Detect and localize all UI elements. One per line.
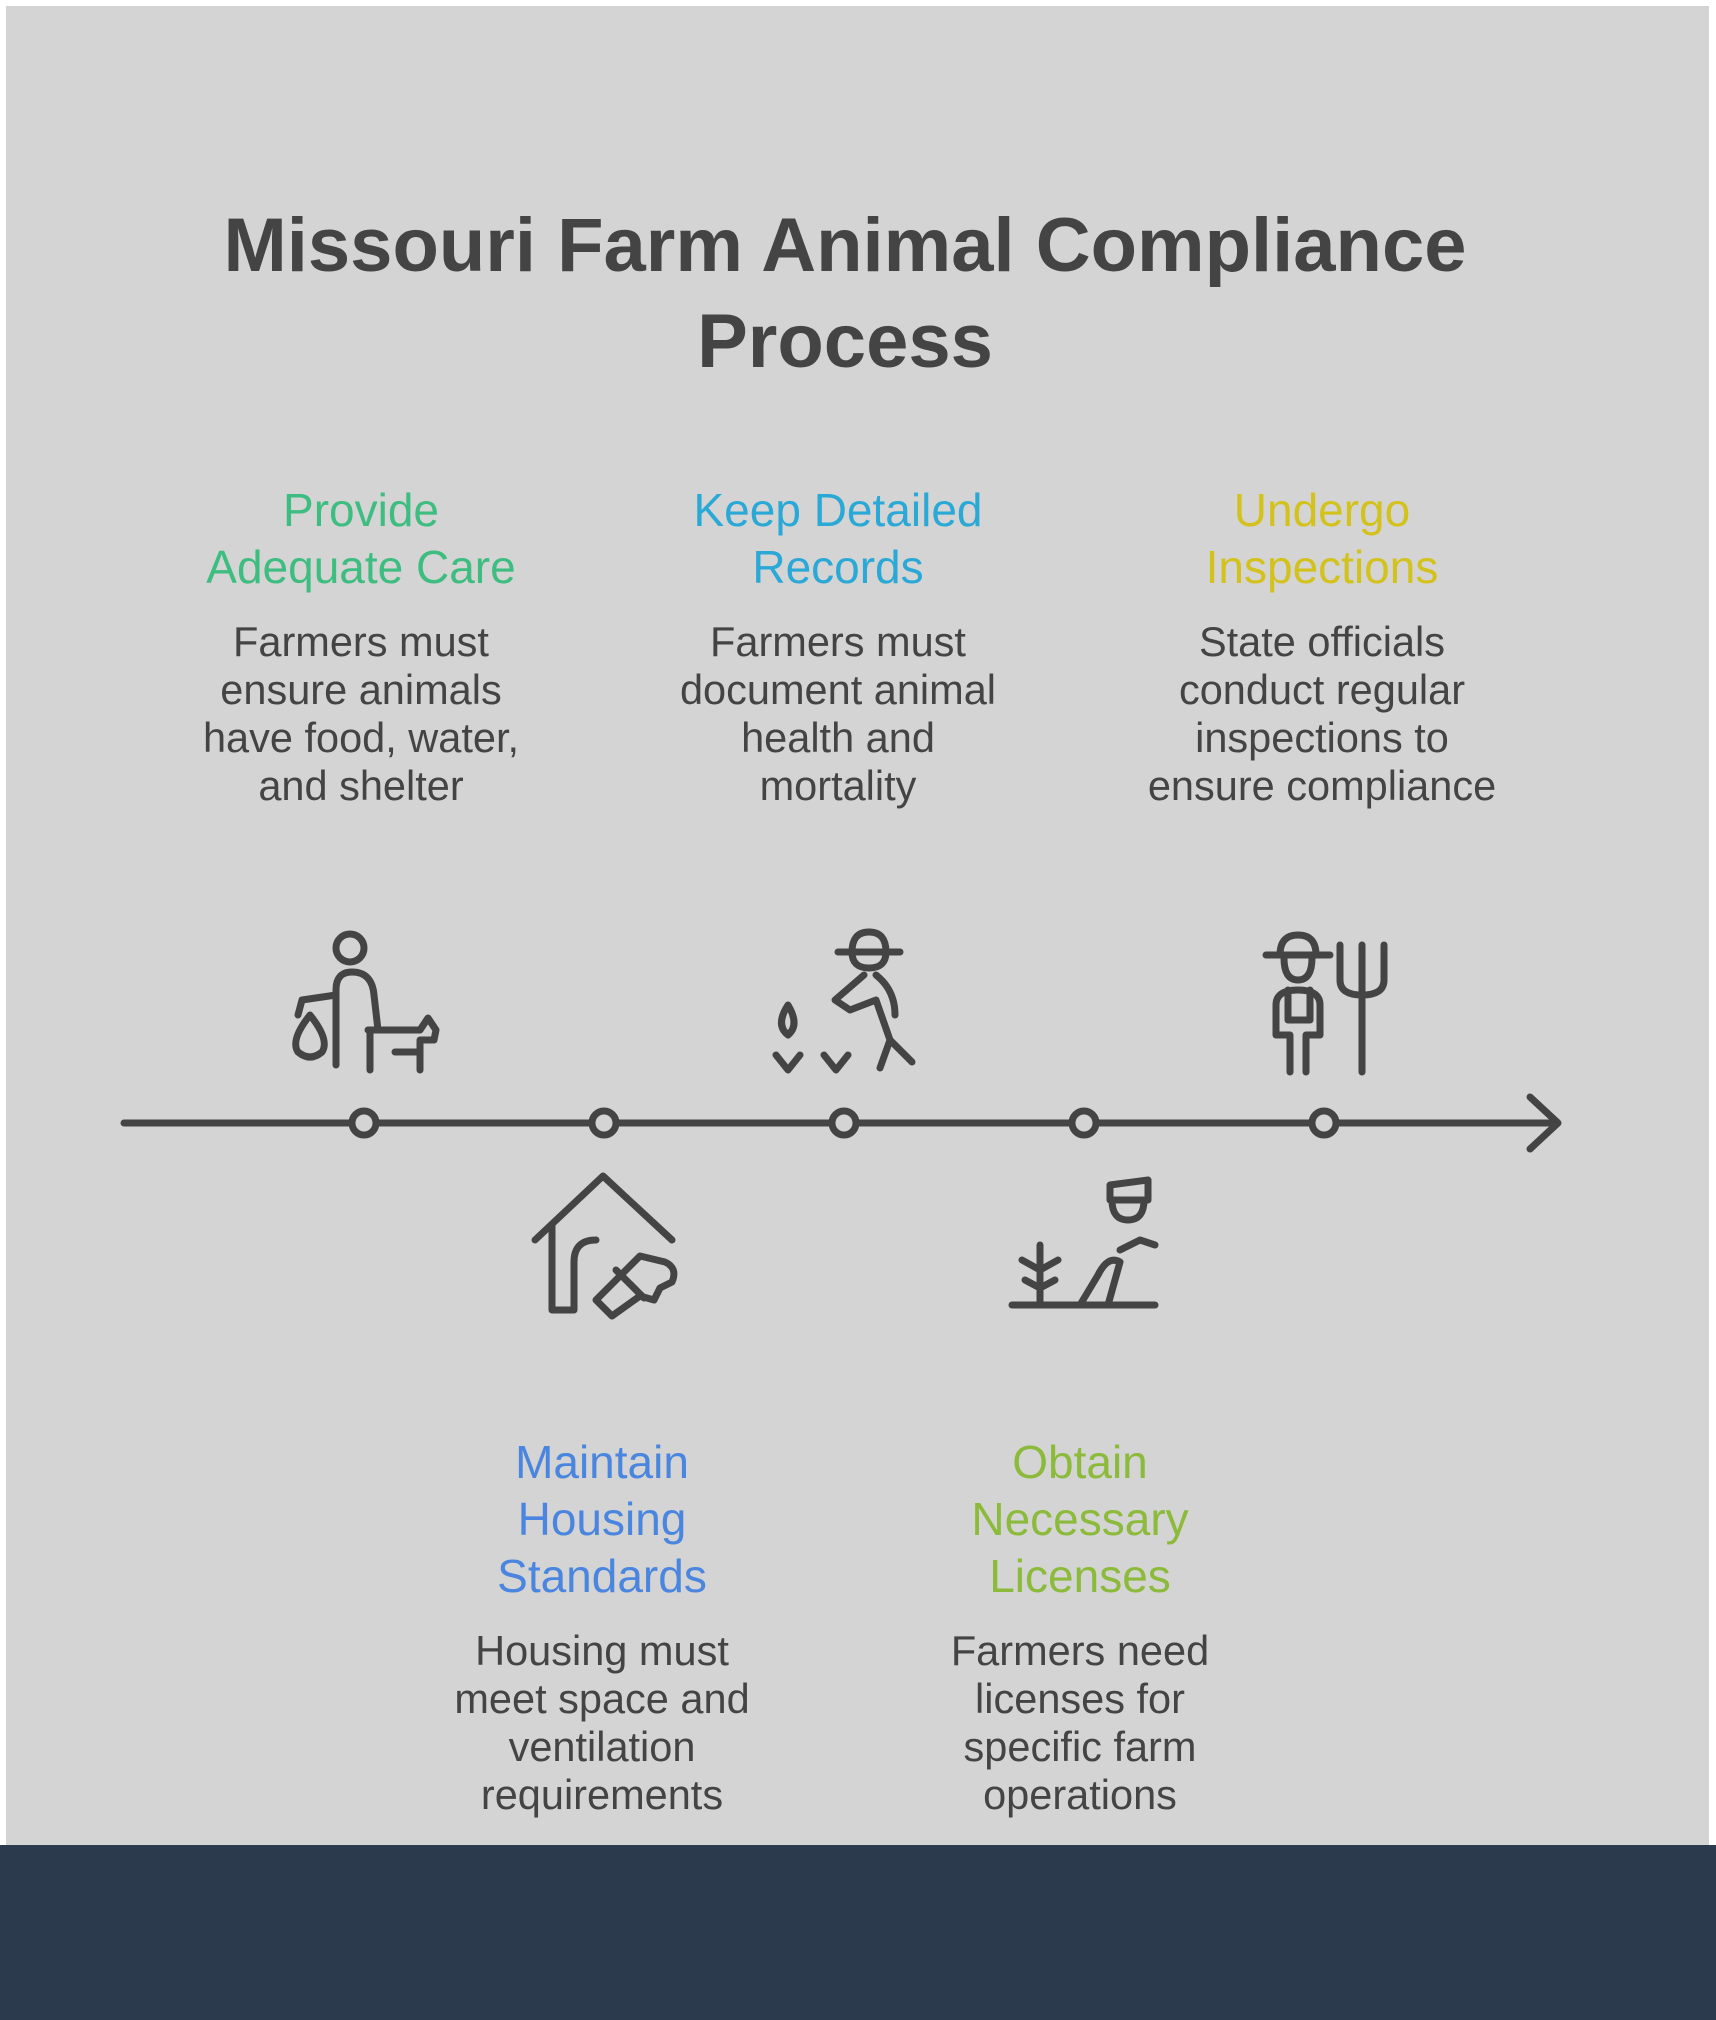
step: obtain necessary licenses: Obtain: [1012, 1436, 1148, 1488]
step: undergo inspections: conduct regular: [1179, 666, 1465, 713]
step: undergo inspections: [1148, 484, 1496, 809]
icon: farmer planting: [776, 932, 912, 1070]
step: undergo inspections: Undergo: [1234, 484, 1410, 536]
step: undergo inspections: inspections to: [1195, 714, 1449, 761]
step: provide adequate care: Adequate Care: [206, 541, 516, 593]
step: undergo inspections: Inspections: [1206, 541, 1438, 593]
step: provide adequate care: Provide: [283, 484, 439, 536]
step: provide adequate care: ensure animals: [220, 666, 502, 713]
step: maintain housing standards: requirements: [481, 1771, 723, 1818]
step: keep detailed records: mortality: [760, 762, 916, 809]
step: maintain housing standards: Housing must: [475, 1627, 729, 1674]
icon: person feeding animal: [296, 934, 436, 1070]
step: maintain housing standards: Maintain: [515, 1436, 689, 1488]
step: undergo inspections: ensure compliance: [1148, 762, 1496, 809]
step: maintain housing standards: ventilation: [509, 1723, 695, 1770]
icon: worker with plant: [1012, 1180, 1155, 1305]
title: [223, 203, 1466, 384]
timeline arrow: [124, 1097, 1558, 1149]
step: keep detailed records: Farmers must: [710, 618, 966, 665]
step: undergo inspections: State officials: [1199, 618, 1445, 665]
title: Missouri Farm Animal Compliance: [223, 203, 1466, 288]
icon: farmer with pitchfork: [1266, 935, 1384, 1072]
step: maintain housing standards: meet space and: [454, 1675, 750, 1722]
step: maintain housing standards: [454, 1436, 750, 1818]
step: provide adequate care: [203, 484, 519, 809]
step: keep detailed records: Records: [752, 541, 924, 593]
step: provide adequate care: and shelter: [258, 762, 464, 809]
icon: house with animal: [535, 1176, 674, 1316]
step: keep detailed records: health and: [741, 714, 935, 761]
step: obtain necessary licenses: Necessary: [971, 1493, 1189, 1545]
step: keep detailed records: [680, 484, 996, 809]
step: obtain necessary licenses: licenses for: [975, 1675, 1185, 1722]
step: keep detailed records: Keep Detailed: [694, 484, 982, 536]
step: obtain necessary licenses: Farmers need: [951, 1627, 1209, 1674]
step: maintain housing standards: Standards: [497, 1550, 707, 1602]
step: obtain necessary licenses: specific farm: [964, 1723, 1196, 1770]
step: provide adequate care: Farmers must: [233, 618, 489, 665]
step: obtain necessary licenses: operations: [983, 1771, 1177, 1818]
step: keep detailed records: document animal: [680, 666, 996, 713]
title: Process: [697, 299, 993, 384]
step: maintain housing standards: Housing: [518, 1493, 686, 1545]
step: provide adequate care: have food, water,: [203, 714, 519, 761]
step: obtain necessary licenses: Licenses: [989, 1550, 1171, 1602]
step: obtain necessary licenses: [951, 1436, 1209, 1818]
